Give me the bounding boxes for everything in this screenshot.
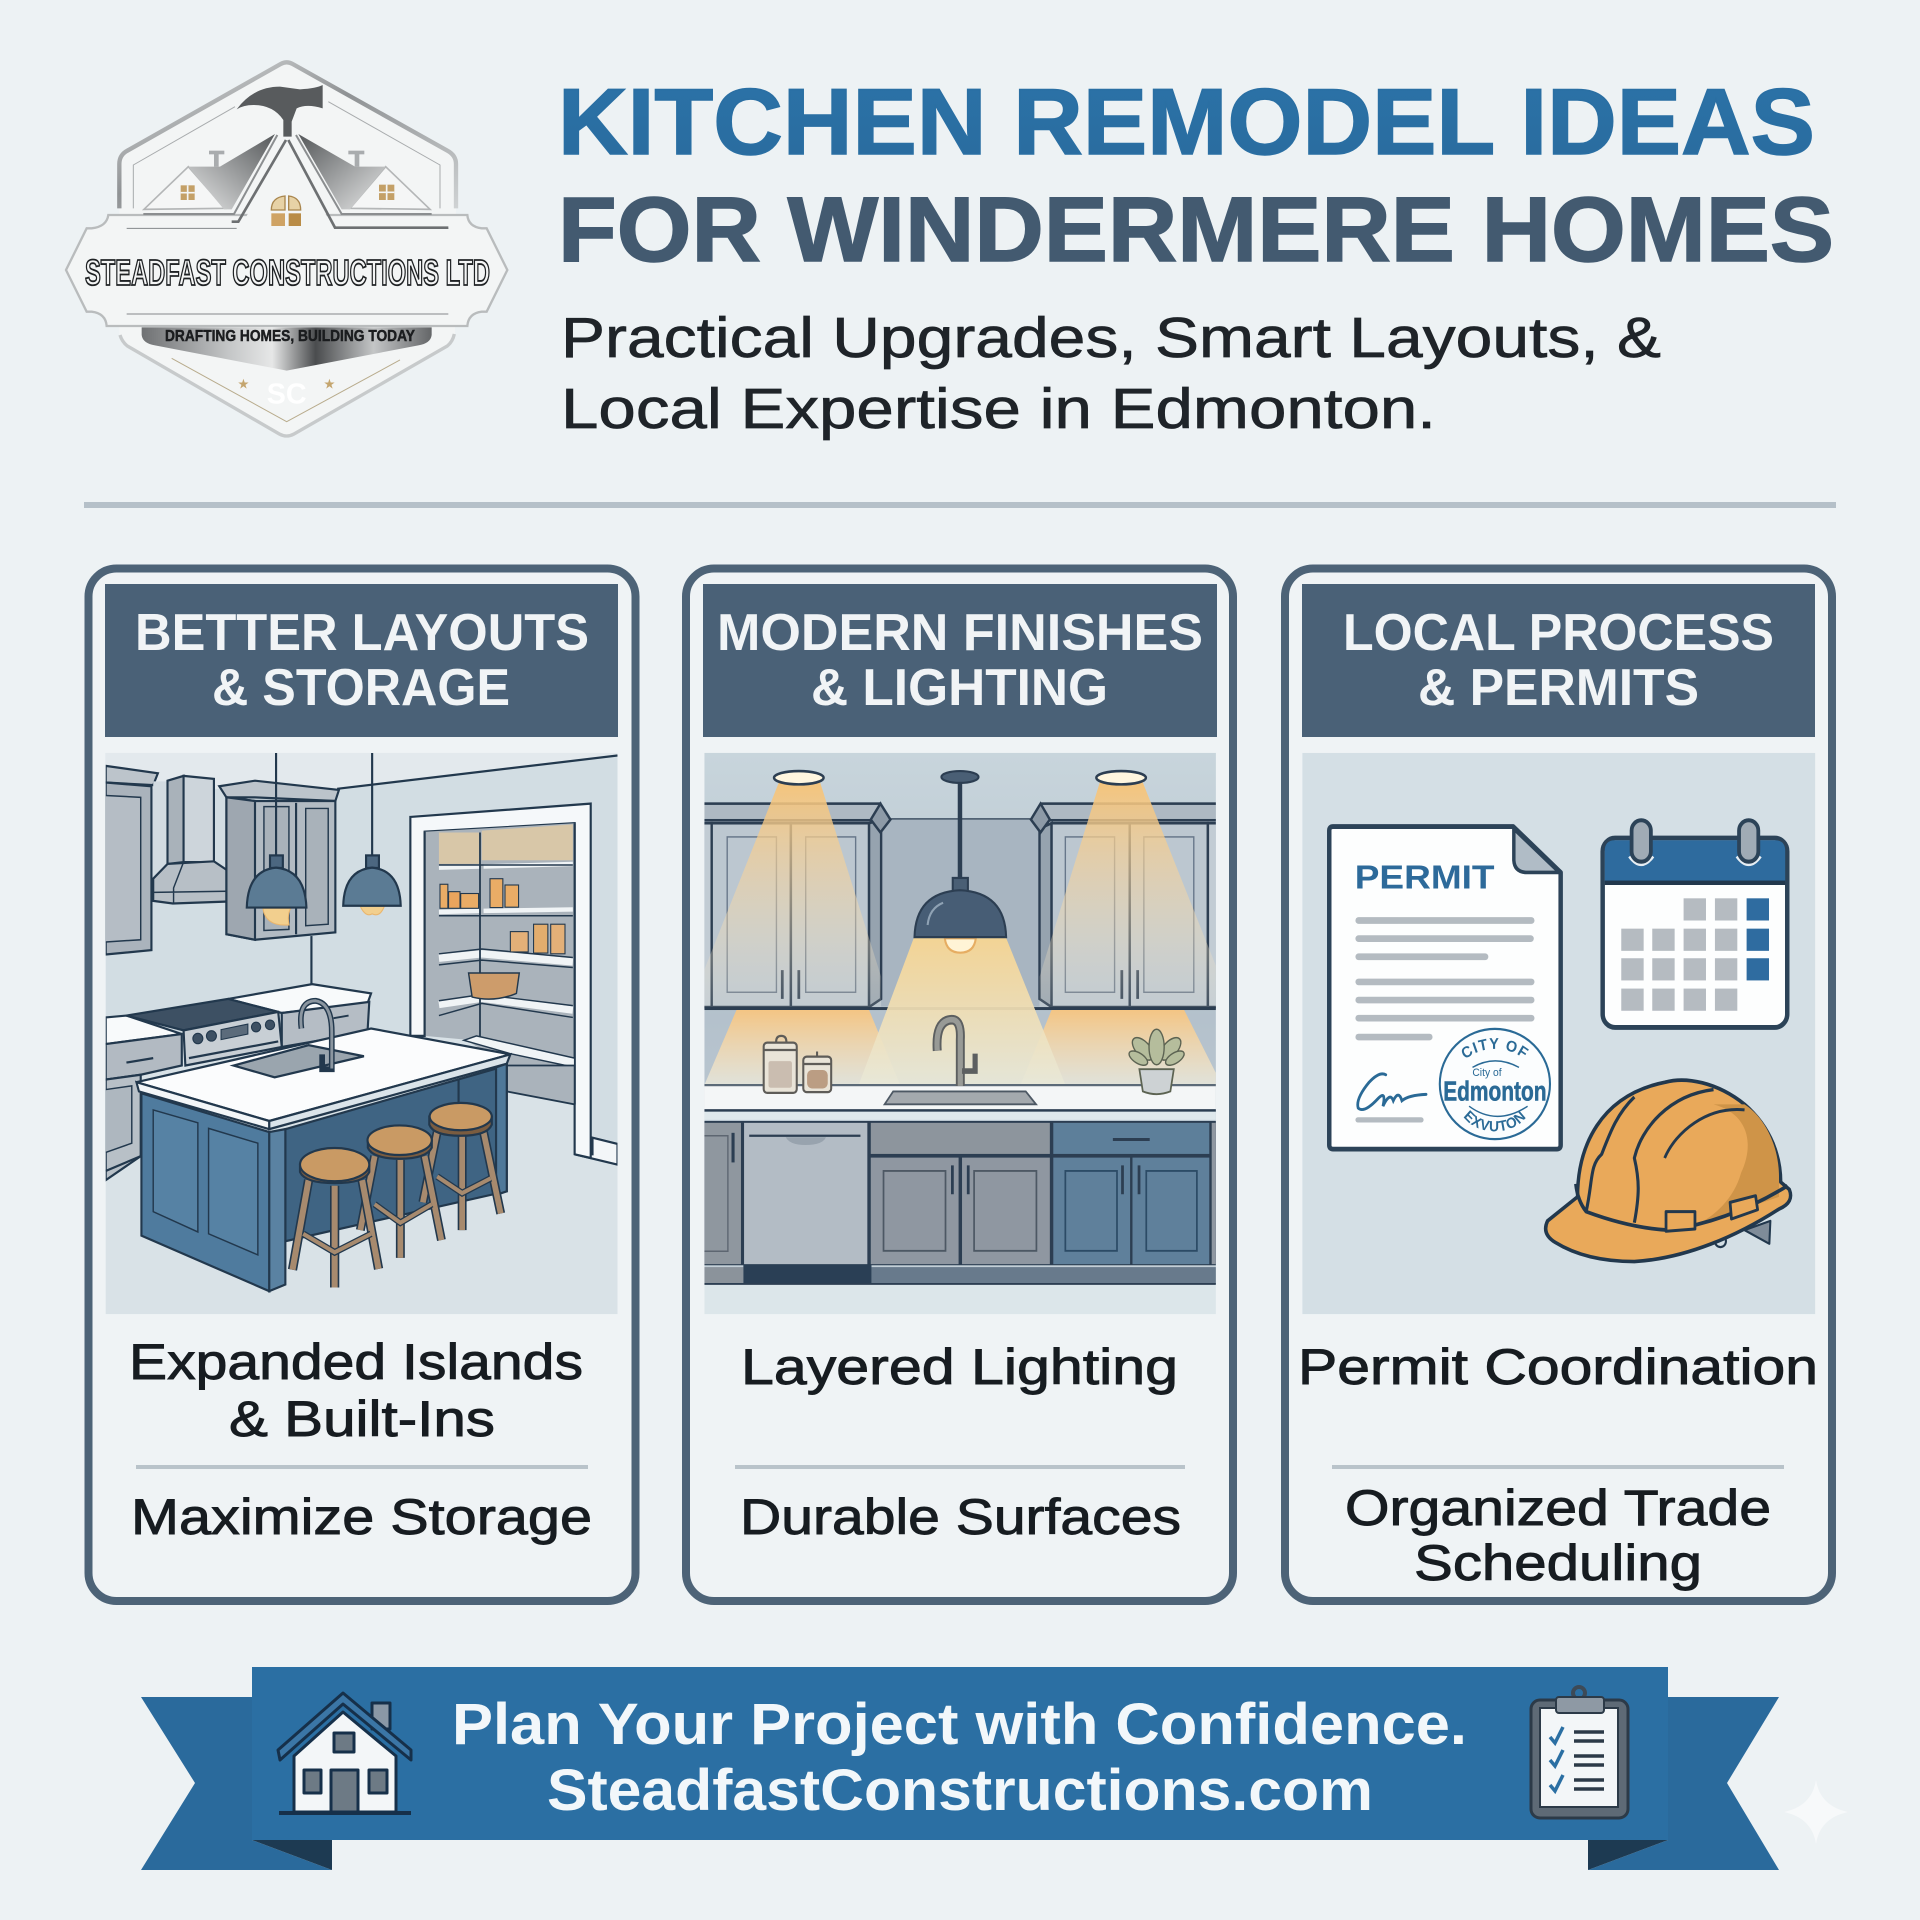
feature: organized trade scheduling: Scheduling [1414,1535,1702,1591]
title [558,69,1834,281]
base cabinets [704,1121,1216,1285]
ribbon main band [252,1667,1668,1840]
logo: Steadfast Constructions Ltd [66,62,507,436]
faucet [937,1020,975,1086]
city of Edmonton stamp: City of [1472,1067,1502,1079]
banner text: Plan Your Project with Confidence. [452,1692,1467,1757]
kitchen island [136,1001,510,1291]
logo name band [66,215,507,326]
left wall cabinet [106,766,158,955]
city of Edmonton stamp: Edmonton [1443,1075,1547,1107]
panel header: & LIGHTING [811,659,1108,717]
logo badge outline [119,62,456,436]
pendant light [915,771,1006,953]
panel header [703,584,1217,737]
panel header: MODERN FINISHES [717,604,1203,662]
city of Edmonton stamp: EXVUTON [1464,1110,1526,1132]
feature: organized trade scheduling [1345,1480,1771,1591]
right wall cabinet [219,781,339,940]
logo tagline: DRAFTING HOMES, BUILDING TODAY [165,328,415,345]
feature: layered lighting: Layered Lighting [741,1339,1178,1395]
panel header [105,584,618,737]
illustration: layered kitchen lighting [700,753,1222,1314]
signature [1358,1074,1426,1110]
feature: expanded islands: Expanded Islands [129,1334,583,1390]
logo hammer [237,85,323,137]
panel frame [1285,568,1832,1601]
logo company name: STEADFAST CONSTRUCTIONS LTD [85,252,490,293]
panel: better layouts and storage [88,568,636,1601]
back counter and range [106,984,371,1180]
pantry [410,804,591,1158]
potted plant [1127,1029,1186,1094]
subtitle: Practical Upgrades, Smart Layouts, & [561,306,1661,370]
logo monogram: SC [267,378,307,410]
feature: maximize storage: Maximize Storage [131,1489,592,1545]
logo window [271,196,301,226]
feature: organized trade scheduling: Organized Trade [1345,1480,1771,1536]
panel: local process and permits [1281,564,1836,1605]
permit document [1327,824,1563,1152]
feature: expanded islands [129,1334,583,1447]
feature: permit coordination: Permit Coordination [1298,1339,1818,1395]
banner: call to action ribbon [141,1667,1779,1870]
pendant light beam [859,938,1065,1085]
title line 2: FOR WINDERMERE HOMES [558,179,1834,281]
panel header: LOCAL PROCESS [1343,604,1774,662]
logo star right: ★ [323,376,335,391]
logo stars: ★ [237,376,249,391]
panel header: BETTER LAYOUTS [135,604,589,662]
banner text [452,1692,1467,1823]
panel header: & PERMITS [1418,659,1699,717]
banner text: SteadfastConstructions.com [547,1758,1373,1823]
panel header: & STORAGE [212,659,510,717]
feature: durable surfaces: Durable Surfaces [740,1489,1181,1545]
hard hat [1546,1080,1791,1262]
recessed lights [774,771,1146,784]
panel frame [88,568,636,1601]
icon: sparkle watermark [1784,1780,1848,1844]
permit document: PERMIT [1355,859,1495,896]
panel frame [686,568,1233,1601]
upper cabinets [700,804,1222,1007]
ribbon tail left [141,1697,332,1870]
illustration: permit, calendar, hard hat [1302,753,1815,1314]
floor and baseboard [575,1138,617,1165]
bar stools [292,1103,501,1287]
icon: clipboard checklist [1531,1687,1628,1818]
panel: modern finishes and lighting [686,568,1233,1601]
icon: house [278,1693,411,1815]
city of Edmonton stamp: CITY OF [1462,1038,1529,1058]
subtitle: Local Expertise in Edmonton. [561,377,1436,441]
subtitle [561,306,1661,441]
title line 1: KITCHEN REMODEL IDEAS [558,69,1815,174]
canisters [764,1036,831,1093]
city of Edmonton stamp [1438,1028,1551,1140]
logo roofs and small houses [143,134,448,229]
ribbon tail right [1588,1697,1779,1870]
panel header [1302,584,1815,737]
pendant lights [247,753,401,925]
calendar [1603,820,1787,1027]
feature: expanded islands: & Built-Ins [229,1391,495,1447]
illustration: kitchen island and pantry [106,753,617,1314]
countertop [704,1084,1216,1120]
recessed light beams [704,783,1216,1007]
range hood [152,774,226,905]
logo tagline ribbon [142,327,432,371]
under-cabinet light beams [704,1010,1216,1085]
